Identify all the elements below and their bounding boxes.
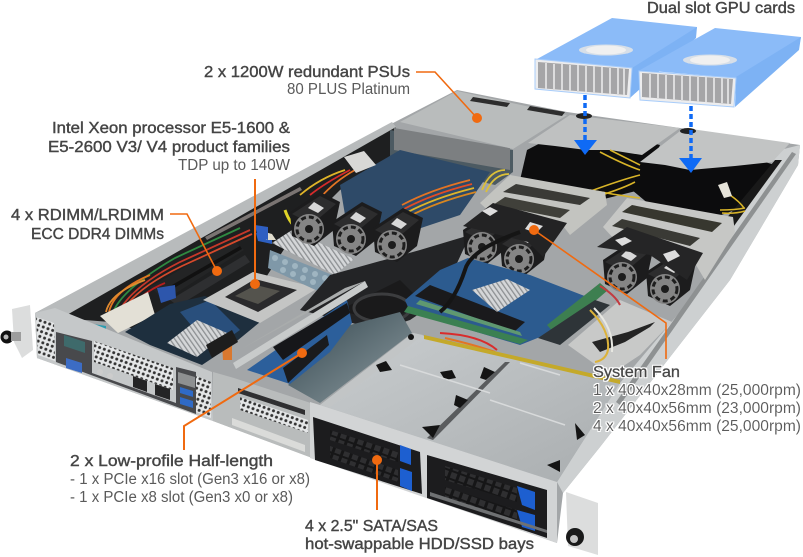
serial and VGA ports [64,335,85,353]
leader: processor [250,179,260,289]
leader: drive bays [372,455,382,510]
motherboard left [125,296,260,365]
label: drive bays: 4 x 2.5" SATA/SAS [305,518,438,535]
GPU card 2 [639,28,801,107]
left compartment: dark interior [60,126,402,345]
fan cage silver 2 [603,198,735,280]
black air duct spaces [520,125,660,200]
dark lower central area [300,235,470,330]
HDD cover plate [320,333,620,482]
label: processor: TDP up to 140W [178,157,290,174]
blue clips [157,285,176,303]
label: drive bays [305,518,534,553]
label: processor: E5-2600 V3/ V4 product families [48,139,290,156]
cover centre seam [427,362,510,440]
HDD bay front [310,402,557,543]
leader: PCIe [184,348,307,450]
center heatsink [472,279,530,312]
blue board behind PSU [340,150,490,235]
label: DIMMs [11,207,164,243]
arrow: GPU 2 down [679,106,702,173]
label: GPU cards: Dual slot GPU cards [647,0,795,17]
left bays [313,417,422,494]
cable orange/yellow left [285,170,509,230]
central floor [288,312,412,403]
label: system fan: System Fan [593,364,680,381]
label: PCIe: - 1 x PCIe x8 slot (Gen3 x0 or x8) [70,489,293,506]
label: system fan: 2 x 40x40x56mm (23,000rpm) [593,400,801,417]
DIMM modules [150,240,244,300]
leader: PSU [416,72,482,123]
black cable [440,232,520,312]
label: processor [48,120,291,174]
chipset heatsink [167,320,227,357]
fan cage silver 1 [480,175,607,235]
central fans [463,203,567,276]
arrow: GPU 1 down [574,95,597,155]
small wiring [440,286,620,362]
PSU cover [400,91,567,149]
label: system fan [593,364,801,435]
label: PCIe: - 1 x PCIe x16 slot (Gen3 x16 or x8) [70,471,310,488]
label: PSUs: 2 x 1200W redundant PSUs [204,64,410,81]
riser card [226,281,368,384]
right bays [427,455,547,538]
left rack ear [0,305,33,358]
right rack ear [566,492,598,555]
PSU grill area and board [390,130,513,185]
label: PSUs: 80 PLUS Platinum [287,81,410,98]
GPU card 1 [535,18,697,98]
duct cables [580,150,745,213]
right fans [597,227,703,306]
leader: system fan [529,225,666,359]
center motherboard [405,258,595,345]
left fans [290,192,423,262]
label: system fan: 1 x 40x40x28mm (25,000rpm) [593,382,801,399]
label: DIMMs: ECC DDR4 DIMMs [31,226,164,243]
duct covers [528,115,680,155]
network ports [133,376,147,392]
rear wall top edge [35,122,396,320]
chassis body [35,90,800,543]
label: PCIe: 2 x Low-profile Half-length [70,453,273,470]
cable bundle red [106,228,252,322]
right floor [568,300,672,375]
label: processor: Intel Xeon processor E5-1600 & [52,120,291,137]
PCIe bracket [213,372,320,458]
VRM heatsink [272,230,354,275]
orange thermal part [222,343,232,360]
rear I/O panel [35,308,213,421]
label: DIMMs: 4 x RDIMM/LRDIMM [11,207,164,224]
label: PSUs [204,64,410,98]
label: drive bays: hot-swappable HDD/SSD bays [305,536,534,553]
right green card [547,283,608,335]
power connector [100,292,155,333]
label: PCIe [70,453,310,506]
label: system fan: 4 x 40x40x56mm (25,000rpm) [593,418,801,435]
leader: DIMM [170,214,222,276]
CPU socket [203,272,318,323]
right side rail [557,145,800,493]
